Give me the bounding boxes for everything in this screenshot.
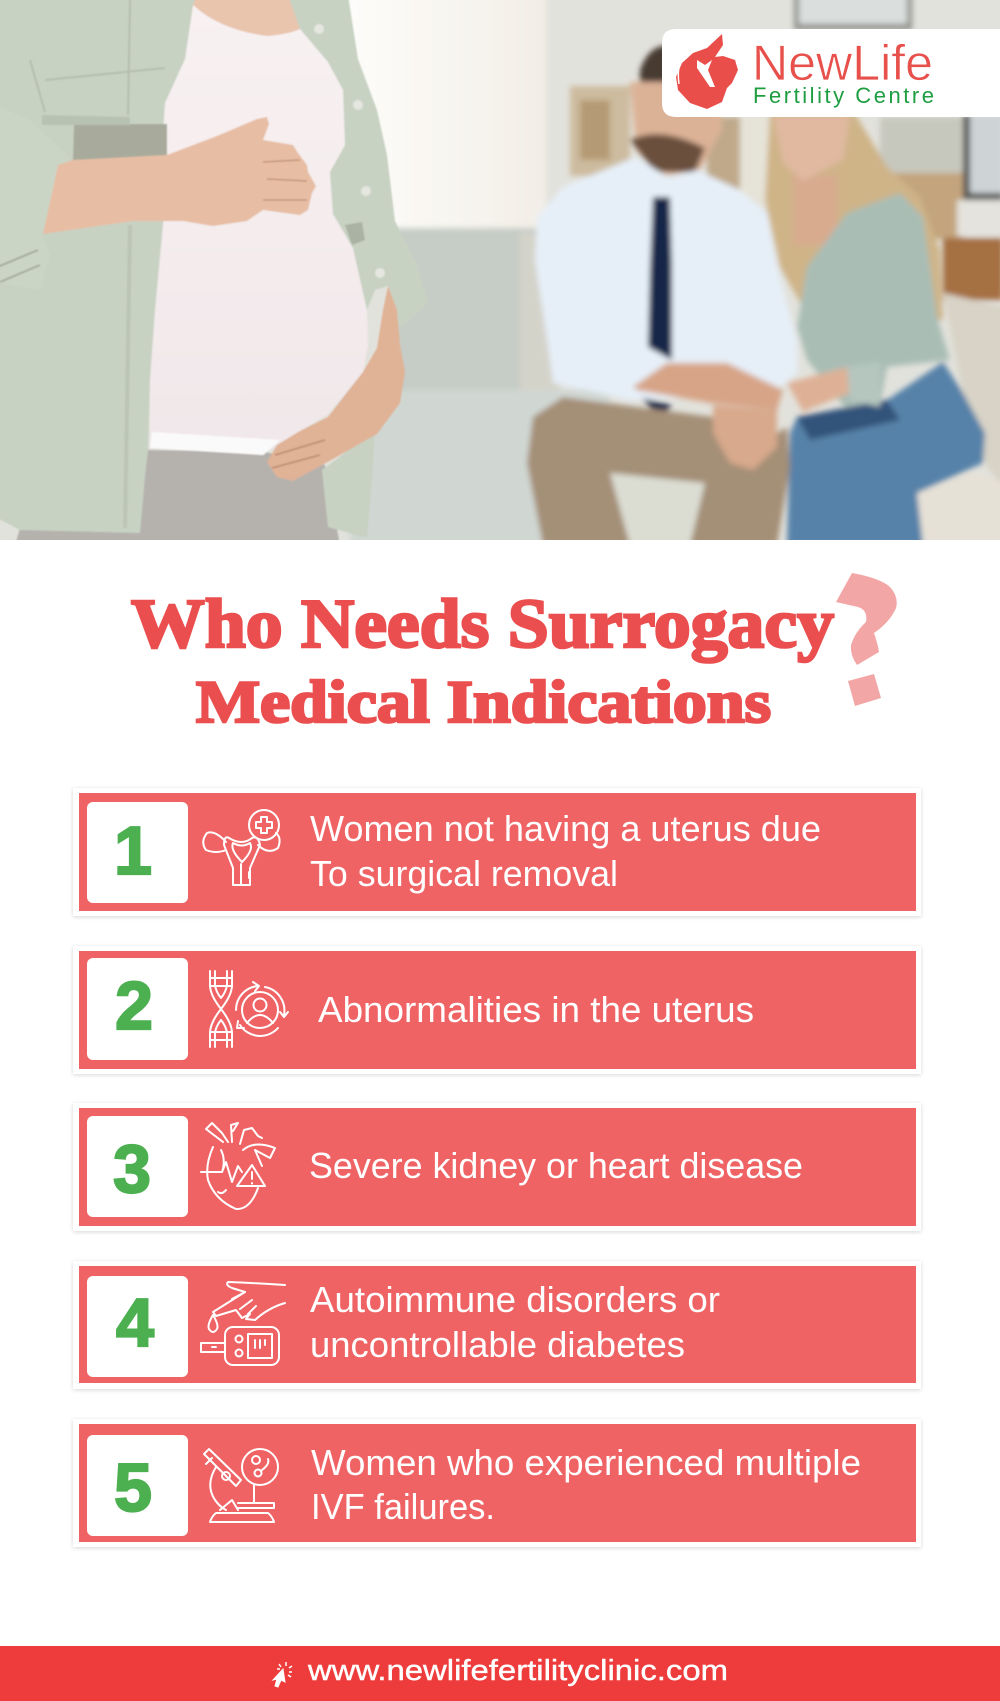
icon: question mark [836, 573, 897, 706]
forearms and hands [787, 367, 850, 412]
logo mark: mother and baby [676, 34, 738, 109]
hero photo: pregnant surrogate and couple on sofa [0, 0, 1000, 550]
man head [635, 41, 662, 86]
cardigan under-arm shadow [73, 124, 167, 160]
icon: DNA helix and person cycle [210, 971, 288, 1047]
logo tagline: Fertility Centre [753, 83, 934, 108]
jeans [787, 362, 985, 545]
text: item 1: Women not having a uterus due [310, 808, 821, 849]
text: item 2: Abnormalities in the uterus [318, 989, 754, 1030]
text: item 5 [311, 1442, 861, 1527]
text: item 1: To surgical removal [310, 853, 618, 894]
icon: heart with warning sign [201, 1123, 275, 1209]
cardigan buttons [314, 24, 385, 278]
text: item 1 [310, 808, 821, 894]
text: item 4 [310, 1279, 720, 1365]
panel: item 3 [73, 1103, 921, 1231]
number 2: 2 [115, 968, 153, 1044]
number 1: 1 [114, 813, 152, 889]
panel: item 5 [73, 1419, 921, 1547]
panel: item 4 [73, 1261, 921, 1389]
tie [648, 197, 672, 360]
grey trousers [15, 450, 340, 545]
right cardigan panel [290, 0, 400, 309]
white tank top [150, 5, 368, 455]
rolled sleeve [0, 105, 70, 290]
title [131, 586, 834, 735]
text: item 3: Severe kidney or heart disease [309, 1145, 803, 1186]
title line 1: Who Needs Surrogacy [131, 586, 834, 663]
upper arm and hand [43, 117, 316, 234]
text: item 5: IVF failures. [311, 1486, 495, 1527]
surrogate figure in the foreground [0, 0, 428, 545]
number 4: 4 [116, 1285, 154, 1361]
text: item 4: uncontrollable diabetes [310, 1324, 685, 1365]
footer bar [0, 1646, 1000, 1701]
text: item 4: Autoimmune disorders or [310, 1279, 720, 1320]
woman hair and face [765, 110, 943, 320]
woman top [797, 193, 950, 410]
man shirt [535, 157, 797, 400]
neck [192, 0, 300, 36]
icon: cursor click [273, 1662, 292, 1687]
icon: microscope with cells [204, 1449, 278, 1522]
panel: item 2 [73, 946, 921, 1074]
number 5: 5 [114, 1450, 152, 1526]
logo badge [662, 29, 1000, 117]
blurred background: room and couple [340, 0, 1000, 550]
panel: item 1 [73, 788, 921, 916]
logo wordmark: NewLife [752, 35, 933, 91]
sofa back and seat [398, 226, 538, 392]
icon: finger prick and glucose meter [201, 1282, 285, 1365]
lower arm and hand [267, 286, 405, 481]
man trousers [527, 397, 790, 545]
icon: uterus with medical cross [203, 810, 280, 885]
left cardigan panel [0, 0, 197, 533]
website url: www.newlifefertilityclinic.com [307, 1655, 728, 1687]
number 3: 3 [113, 1131, 151, 1207]
text: item 5: Women who experienced multiple [311, 1442, 861, 1483]
title line 2: Medical Indications [196, 669, 771, 735]
